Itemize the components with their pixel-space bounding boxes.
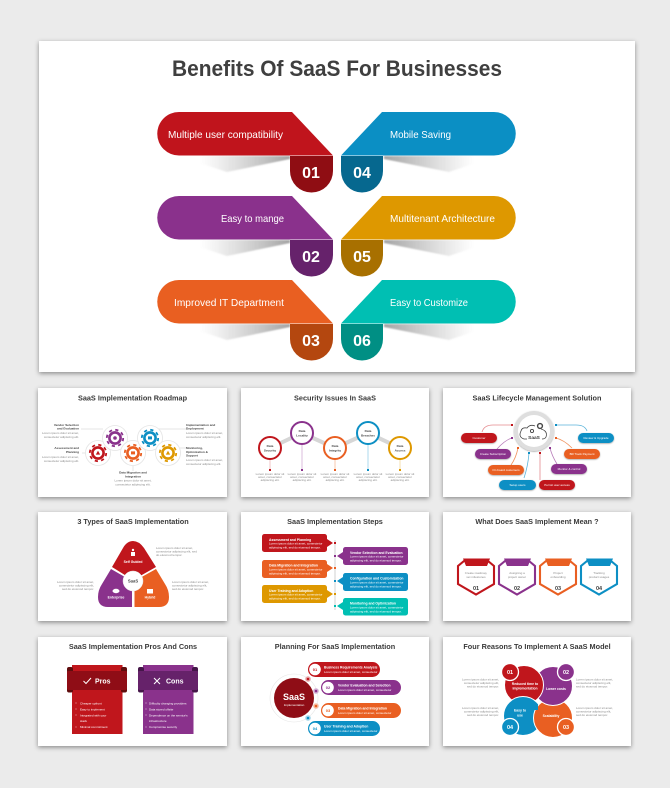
step: Monitoring and Optimization: adipiscing elit, sed do eiusmod tempor. [350,610,402,614]
labels: left column: consectetur adipiscing elit. [44,435,79,439]
text block: top right [156,546,197,557]
node: Data Locality: amet, consectetur [290,475,314,479]
shield 03: Project [553,571,563,575]
labels: right column: Deployment [186,426,204,430]
node: Data Access: Lorem ipsum dolor sit [386,472,414,476]
step: Vendor Selection and Evaluation [337,547,408,565]
text blocks: right: consectetur adipiscing elit, [576,681,611,685]
pill 03: Data Migration and Integration [338,706,387,710]
labels: right column: Lorem ipsum dolor sit amet, [186,431,223,435]
ribbon 06: Easy to Customize [341,280,516,360]
step: Data Migration and Integration [262,560,333,578]
text block: left: sed do eiusmod tempor. [62,587,94,591]
shield 04: product usages [589,575,610,579]
panel: SaaS Implementation Pros And Cons [38,637,227,746]
step: User Training and Adoption [262,585,333,603]
ribbon 02: Easy to mange [157,196,333,276]
segment: Hybrid: Hybrid [145,596,155,600]
card: Cons: Data stored offsite [149,708,174,712]
shield 04 [581,558,617,594]
badge 03: 03 [563,725,569,731]
panel: SaaS Implementation Roadmap: SaaS Implementation Roadmap [78,394,188,402]
labels: left column: Assessment and [54,446,79,450]
pill: Permit user access [539,480,575,490]
petal: Scalability [534,698,572,738]
text blocks: left: sed do eiusmod tempor. [467,713,499,717]
pill 03: Lorem ipsum dolor sit amet, consectetur [338,711,391,715]
gear: monitoring [156,440,180,466]
pill: Customer [461,433,497,443]
gear: implementation [138,426,162,450]
step: Data Migration and Integration: adipiscing elit, sed do eiusmod tempor. [269,572,321,576]
step: Monitoring and Optimization: Lorem ipsum dolor sit amet, consectetur [350,606,403,610]
panel: Security Issues In SaaS: Security Issues In SaaS [294,394,376,402]
panel: Planning For SaaS Implementation [241,637,429,746]
pill: Monitor & control: Monitor & control [558,467,581,471]
hub: SaaS Implementation: Implementation [284,703,305,707]
step: User Training and Adoption: User Training and Adoption [269,589,313,593]
pill 01: 01 [313,667,318,672]
pill: Permit user access: Permit user access [544,483,570,487]
badge 01: 01 [507,670,513,676]
text blocks: left: sed do eiusmod tempor. [467,684,499,688]
pill: Setup users: Setup users [509,483,526,487]
node: Data Breaches: amet, consectetur [356,475,380,479]
shield 03 [540,558,576,594]
panel: Four Reasons To Implement A SaaS Model [443,637,631,746]
panel: SaaS Implementation Steps: SaaS Implementation Steps [287,517,383,526]
node: Data Integrity: adipiscing elit. [326,478,345,482]
labels: left column: Lorem ipsum dolor sit amet, [42,455,79,459]
text block: left: consectetur adipiscing elit, [59,584,94,588]
ribbon 03: Improved IT Department: Improved IT Department [174,297,284,309]
ring dots [305,676,319,721]
pill: Monitor & control [551,464,587,474]
node: Data Breaches: adipiscing elit. [359,478,378,482]
text blocks: right: Lorem ipsum dolor sit amet, [576,678,613,682]
card: Pros: Cheaper upfront [80,702,102,706]
pill 03 [321,703,401,718]
step: Assessment and Planning: adipiscing elit, sed do eiusmod tempor. [269,546,321,550]
text blocks: left: consectetur adipiscing elit, [464,710,499,714]
panel: 3 Types of SaaS Implementation: 3 Types of SaaS Implementation [77,517,189,526]
ribbon 01: Multiple user compatibility: 01 [302,165,320,182]
labels: left column: Planning [66,450,79,454]
text blocks: right: sed do eiusmod tempor. [576,713,608,717]
labels: left column [42,423,79,463]
labels: right column: Lorem ipsum dolor sit amet, [186,458,223,462]
step: Configuration and Customization: adipiscing elit, sed do eiusmod tempor. [350,584,402,588]
pill: On board customers: On board customers [492,468,520,472]
panel: 3 Types of SaaS Implementation [38,512,227,621]
pill: Customer: Customer [472,436,486,440]
node: Data Locality: Lorem ipsum dolor sit [288,472,316,476]
ribbon 02: Easy to mange: Easy to mange [221,213,284,225]
shield 01 [458,558,494,594]
pill 02: Lorem ipsum dolor sit amet, consectetur [338,688,391,692]
panel: SaaS Lifecycle Management Solution [443,388,631,497]
pill 04: Lorem ipsum dolor sit amet, consectetur [324,729,377,733]
labels: right column: consectetur adipiscing elit. [186,462,221,466]
ribbon 05: Multitenant Architecture [341,196,516,276]
ribbon 01: Multiple user compatibility: Multiple user compatibility [168,129,284,141]
petal labels: Scalability [543,714,559,718]
node: Data Security [256,437,284,482]
ribbon 03: Improved IT Department [157,280,333,360]
pill: Setup users [499,480,536,490]
node: Data Breaches: Lorem ipsum dolor sit [354,472,382,476]
pill: Review & Upgrade: Review & Upgrade [583,436,609,440]
shield 02: 02 [514,586,520,592]
label: data migration: Lorem ipsum dolor sit amet, [114,478,152,482]
labels: left column: consectetur adipiscing elit. [44,459,79,463]
panel: What Does SaaS Implement Mean ?: What Does SaaS Implement Mean ? [475,517,599,526]
labels: left column: Vendor Selection [54,423,79,427]
ribbon 02: Easy to mange: 02 [302,249,320,266]
node: Data Security: Data [267,444,274,448]
step: User Training and Adoption: Lorem ipsum dolor sit amet, consectetur [269,592,322,596]
node: Data Breaches: Data [365,429,372,433]
node: Data Security: Lorem ipsum dolor sit [256,472,284,476]
badge 04 [502,718,518,736]
node: Data Locality [288,422,316,482]
card: Pros: stack [80,719,88,723]
petal labels: use [517,714,523,718]
pill: Create Subscription: Create Subscription [480,452,506,456]
step: Vendor Selection and Evaluation: Vendor Selection and Evaluation [350,551,403,555]
badge 02 [558,664,574,680]
badge 03 [558,718,574,736]
pill 01: Lorem ipsum dolor sit amet, consectetur [324,670,377,674]
pill 04: User Training and Adoption [324,724,368,728]
shield 04: 04 [596,586,603,592]
panel: What Does SaaS Implement Mean ? [443,512,631,621]
text block: left [57,580,94,591]
node: Data Integrity: amet, consectetur [323,475,347,479]
card: Cons: Dependence on the service's [149,714,188,718]
text block: right: Lorem ipsum dolor sit amet, [172,580,209,584]
shield 02 [499,558,535,594]
segment: Hybrid [134,569,169,607]
ribbon 04: Mobile Saving [341,112,516,192]
node: Data Integrity: Integrity [329,448,341,452]
pill: Bill Track Payment [564,449,600,459]
text block: top right: Lorem ipsum dolor sit amet, [156,546,193,550]
step: Data Migration and Integration: Data Migration and Integration [269,564,318,568]
labels: left column: Lorem ipsum dolor sit amet, [42,431,79,435]
badge 04: 04 [507,725,514,731]
node: Data Integrity: Data [332,444,339,448]
pill 02: 02 [326,685,331,690]
text block: top right: consectetur adipiscing elit, sed [156,550,197,554]
hub: SaaS cloud: SaaS [528,435,541,441]
pill: Review & Upgrade [578,433,614,443]
petal: Easy to use [504,696,542,736]
pill: Bill Track Payment: Bill Track Payment [570,452,595,456]
card: Pros: Pros [95,678,111,686]
labels: right column: Implementation and [186,423,215,427]
card: Cons: infrastructure [149,719,167,723]
ribbon 06: Easy to Customize: 06 [353,333,371,350]
panel: SaaS Implementation Pros And Cons: SaaS Implementation Pros And Cons [69,642,197,651]
node: Data Access: Access [395,448,406,452]
ribbon 01: Multiple user compatibility [157,112,333,192]
ribbon 04: Mobile Saving: 04 [353,165,371,182]
text blocks: left [462,678,499,717]
gear: assessment [86,440,110,466]
hub: SaaS Implementation: SaaS [283,692,305,702]
pill: On board customers [488,465,524,475]
card: Cons: Compromise security [149,725,178,729]
shield 03: 03 [555,586,561,592]
petal: Lower costs [534,666,572,706]
panel: SaaS Lifecycle Management Solution: SaaS Lifecycle Management Solution [473,394,601,402]
step: Assessment and Planning [262,534,333,552]
step: Monitoring and Optimization [337,598,408,616]
shield 01: set milestones [466,575,486,579]
petal: Reduced time to implementation [504,666,544,704]
card: Pros: Easy to implement [80,708,105,712]
node: Data Access [386,437,414,482]
segment: Self Guided: Self Guided [124,560,142,564]
pill 02: Vendor Evaluation and Selection [338,684,391,688]
panel: Four Reasons To Implement A SaaS Model: Four Reasons To Implement A SaaS Model [463,642,611,651]
panel: Security Issues In SaaS [241,388,429,497]
node: Data Access: adipiscing elit. [391,478,410,482]
node: Data Access: Data [397,444,404,448]
segment: Enterprise: Enterprise [108,596,124,600]
step: Vendor Selection and Evaluation: adipiscing elit, sed do eiusmod tempor. [350,558,402,562]
badge 01 [502,664,518,680]
segment: Enterprise [98,569,132,607]
segment: Self Guided [112,541,156,580]
node: Data Security: Security [264,448,276,452]
connectors [482,425,587,480]
badge 02: 02 [563,670,569,676]
petal overlap: blue over red [505,696,538,710]
panel: SaaS Implementation Roadmap [38,388,227,497]
step: Configuration and Customization: Configuration and Customization [350,576,404,580]
text blocks: right: consectetur adipiscing elit, [576,710,611,714]
text block: right: consectetur adipiscing elit, [172,584,207,588]
label: data migration: consectetur adipiscing elit. [115,482,151,486]
hub: SaaS cloud [514,411,554,451]
step: Data Migration and Integration: Lorem ipsum dolor sit amet, consectetur [269,568,322,572]
text blocks: left: Lorem ipsum dolor sit amet, [462,678,499,682]
shield 01: Create roadmap, [465,571,487,575]
text block: right [172,580,209,591]
shield 04: Tracking [593,571,605,575]
node: Data Locality: adipiscing elit. [293,478,312,482]
shield 02: project owner [508,575,526,579]
card: Cons: Cons [166,678,184,686]
ribbon 05: Multitenant Architecture: Multitenant Architecture [390,213,495,225]
node: Data Breaches [354,422,382,482]
label: data migration: Integration [125,474,141,478]
node: Data Locality: Data [299,429,306,433]
labels: right column: Optimization & [186,450,209,454]
pill 03: 03 [326,708,331,713]
petal labels [512,682,566,718]
labels: right column: Monitoring, [186,446,203,450]
node: Data Integrity: Lorem ipsum dolor sit [321,472,350,476]
card: Cons [138,665,198,734]
gear: data migration [120,440,146,466]
step: Configuration and Customization: Lorem ipsum dolor sit amet, consectetur [350,580,403,584]
text block: right: sed do eiusmod tempor. [172,587,204,591]
pill 01 [308,662,380,677]
hub: SaaS: SaaS [128,578,138,584]
node: Data Security: amet, consectetur [258,475,282,479]
card: Pros: Minimal commitment [80,725,108,729]
pill: Create Subscription [475,449,511,459]
text block: left: Lorem ipsum dolor sit amet, [57,580,94,584]
panel: SaaS Implementation Steps [241,512,429,621]
hub: SaaS [123,571,143,591]
label: data migration [114,470,152,486]
ribbon 03: Improved IT Department: 03 [302,333,320,350]
hub: SaaS Implementation [270,674,318,722]
text blocks: right [576,678,613,717]
step: Assessment and Planning: Lorem ipsum dolor sit amet, consectetur [269,542,322,546]
node: Data Security: adipiscing elit. [261,478,280,482]
step: Vendor Selection and Evaluation: Lorem ipsum dolor sit amet, consectetur [350,554,403,558]
pill 04 [308,721,380,736]
step: Monitoring and Optimization: Monitoring and Optimization [350,602,396,606]
text blocks: left: consectetur adipiscing elit, [464,681,499,685]
node: Data Integrity [321,437,350,482]
step: User Training and Adoption: adipiscing elit, sed do eiusmod tempor. [269,596,321,600]
pill 04: 04 [313,726,318,731]
shield 02: Assigning a [509,571,525,575]
pill 02 [321,680,401,695]
node: Data Access: amet, consectetur [388,475,412,479]
node: Data Breaches: Breaches [361,434,375,438]
petal labels: Reduced time to [512,682,538,686]
step: Configuration and Customization [337,573,408,591]
panel: Planning For SaaS Implementation: Planning For SaaS Implementation [275,642,395,651]
petal labels: implementation [512,686,538,690]
step: Assessment and Planning: Assessment and Planning [269,538,311,542]
petal labels: Easy to [514,708,526,712]
label: data migration: Data Migration and [119,470,147,474]
card: Cons: Difficulty changing providers [149,702,187,706]
text block: top right: do eiusmod tempor. [156,553,183,557]
card: Pros: Integrated with your [80,714,106,718]
ribbon 04: Mobile Saving: Mobile Saving [390,129,451,141]
petal labels: Lower costs [546,687,566,691]
labels: right column [186,423,223,466]
shield 01: 01 [473,586,479,592]
text blocks: right: Lorem ipsum dolor sit amet, [576,706,613,710]
text blocks: left: Lorem ipsum dolor sit amet, [462,706,499,710]
panel: main benefits slide [39,41,635,372]
labels: right column: consectetur adipiscing elit. [186,435,221,439]
gear: vendor selection [102,426,128,450]
ribbon 05: Multitenant Architecture: 05 [353,249,371,266]
text blocks: right: sed do eiusmod tempor. [576,684,608,688]
labels: left column: and Evaluation [57,426,79,430]
pill 01: Business Requirements Analysis [324,666,378,670]
node: Data Locality: Locality [296,434,308,438]
shield 03: onboarding [550,575,566,579]
card: Pros [67,665,127,734]
ribbon 06: Easy to Customize: Easy to Customize [390,297,468,309]
labels: right column: Support [186,454,198,458]
title: Benefits Of SaaS For Businesses [172,56,502,81]
